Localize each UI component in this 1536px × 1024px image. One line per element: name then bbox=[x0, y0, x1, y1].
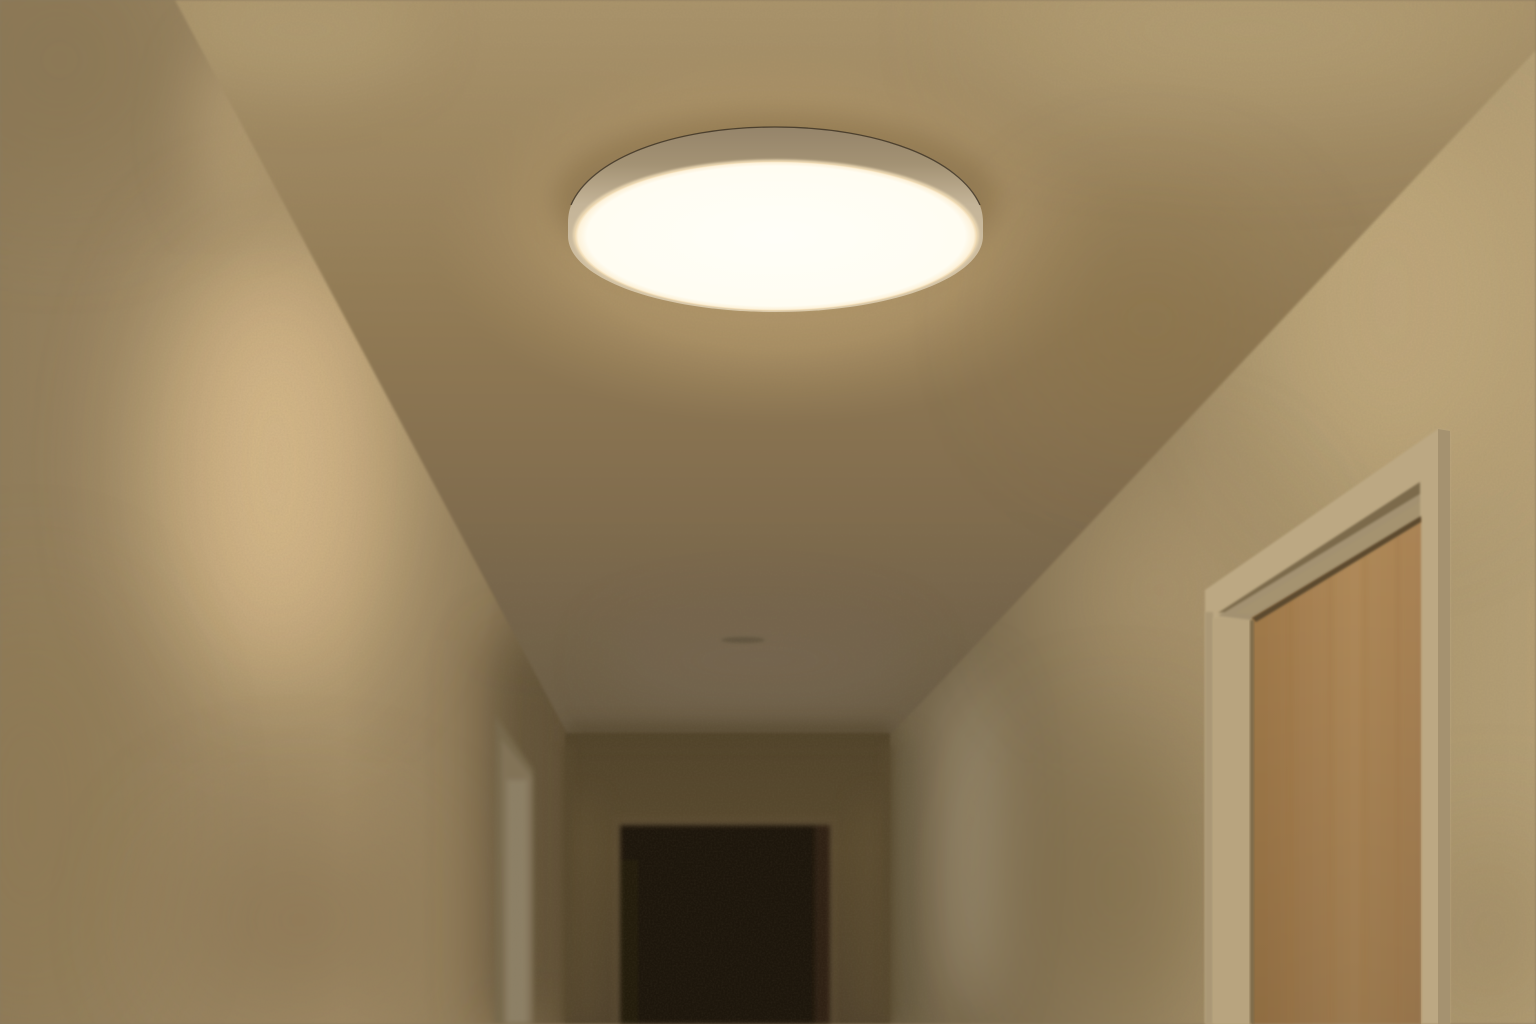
left casing bbox=[1213, 618, 1252, 1024]
left wall bbox=[90, 50, 567, 1024]
soft junction far wall to ceiling bbox=[565, 724, 893, 742]
shadow around light housing bbox=[554, 112, 998, 288]
left casing shadow bbox=[1205, 612, 1213, 1024]
soft junction far wall to right wall bbox=[882, 745, 894, 1024]
door frame outer casing bbox=[1205, 429, 1450, 1024]
door grain lines bbox=[1290, 535, 1398, 1024]
door top shadow bbox=[1252, 516, 1421, 622]
door with frame bbox=[1205, 429, 1450, 1024]
left far doorway trim bbox=[495, 715, 533, 1024]
far dark doorway bbox=[612, 815, 838, 1024]
door frame side edge bbox=[1438, 429, 1450, 1024]
lit inner trim bbox=[573, 160, 979, 310]
ceiling bbox=[170, 0, 1536, 735]
icon: distant ceiling fixture bbox=[721, 637, 765, 643]
right wall bbox=[880, 40, 1536, 1024]
light housing rim bbox=[568, 127, 983, 312]
glowing diffuser bbox=[575, 162, 977, 310]
wooden door panel bbox=[1252, 518, 1421, 1024]
door left shadow bbox=[1250, 620, 1254, 1024]
soft junction far wall to left wall bbox=[561, 745, 573, 1024]
far end wall bbox=[560, 733, 895, 1024]
dark top edge of rim bbox=[571, 127, 980, 205]
frame recess bbox=[1218, 482, 1420, 620]
ceiling light fixture bbox=[568, 127, 983, 312]
